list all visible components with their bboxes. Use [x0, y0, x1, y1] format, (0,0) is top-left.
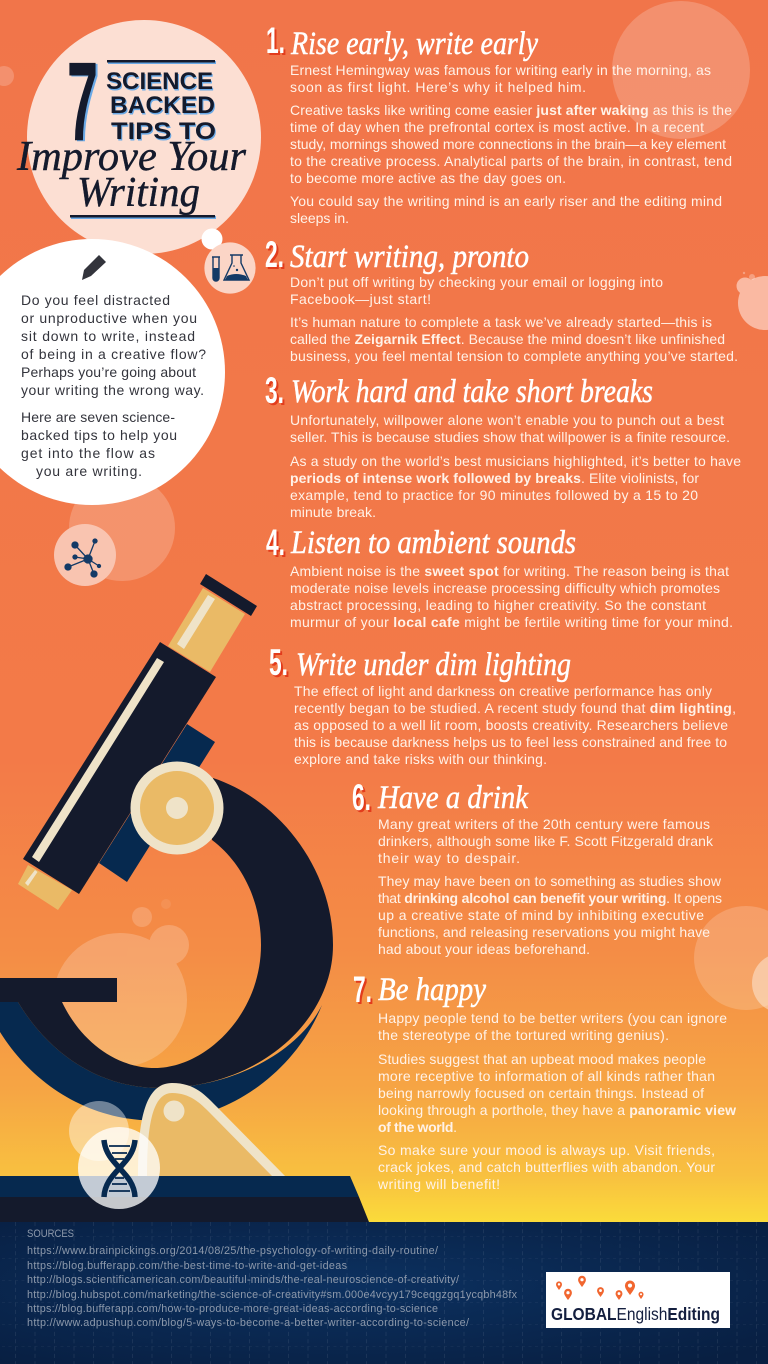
title: 7: 7 [67, 39, 98, 164]
title: 7 [67, 39, 100, 165]
tip 7 body: looking through a porthole, they have a panoramic view [378, 1102, 736, 1118]
tip 5 body: The effect of light and darkness on creative performance has only [294, 683, 712, 699]
tip 5 number: 5. [269, 642, 288, 683]
tip 3 body: Unfortunately, willpower alone won’t enable you to punch out a best [290, 412, 724, 428]
tip 7 number [353, 969, 374, 1012]
tip 1 body: Creative tasks like writing come easier just after waking as this is the [290, 102, 732, 118]
title: science backed tips to: SCIENCE [107, 70, 214, 96]
tip 7 body: crack jokes, and catch butterflies with abandon. Your [378, 1159, 715, 1175]
tip 3 number: 3. [265, 370, 284, 411]
tip 2 body [290, 274, 738, 364]
tip 3 body: minute break. [290, 504, 376, 520]
tip 7 number: 7. [355, 971, 374, 1012]
tip 3 heading: Work hard and take short breaks [291, 374, 653, 410]
tip 7 number: 7. [353, 969, 372, 1010]
icon: pencil [82, 255, 106, 280]
tip 7 body: more receptive to information of all kinds rather than [378, 1068, 715, 1084]
tip 6 body: had about your ideas beforehand. [378, 941, 590, 957]
tip 6 [352, 777, 722, 957]
tip 7 body: Studies suggest that an upbeat mood makes people [378, 1051, 706, 1067]
tip 6 body: that drinking alcohol can benefit your writing. It opens [378, 890, 722, 906]
microscope arm shadow [0, 1002, 322, 1120]
tip 6 number [352, 777, 373, 820]
tip 1 [266, 20, 732, 226]
tip 1 body: You could say the writing mind is an early riser and the editing mind [290, 193, 722, 209]
microscope back plate [99, 724, 215, 882]
title circle: 7 [69, 40, 100, 165]
tip 5 [269, 642, 736, 767]
tip 4 heading: Listen to ambient sounds [290, 525, 576, 561]
tip 5 number: 5. [271, 644, 290, 685]
tip 1 body [290, 62, 732, 226]
logo pins [556, 1276, 644, 1300]
tip 6 body: functions, and releasing reservations you might have [378, 924, 710, 940]
title: improve your writing: Improve Your [16, 134, 247, 180]
tip 5 body: as opposed to a well lit room, boosts creativity. Researchers believe [294, 717, 728, 733]
tip 1 body: sleeps in. [290, 210, 349, 226]
microscope [0, 574, 369, 1222]
intro text [21, 292, 206, 479]
title: improve your writing: Writing [77, 170, 200, 216]
microscope upper tube [168, 588, 245, 672]
microscope lower tube [18, 865, 72, 910]
tip 3 number [265, 370, 286, 413]
icon: molecule [54, 524, 116, 586]
tip 7 body: writing will benefit! [377, 1176, 500, 1192]
microscope focus knob [130, 762, 224, 854]
microscope stand [138, 1083, 285, 1176]
intro text: Do you feel distracted [21, 292, 170, 308]
tip 6 body: Many great writers of the 20th century were famous [378, 816, 710, 832]
icon: DNA helix [78, 1127, 160, 1209]
tip 7 heading: Be happy [378, 972, 486, 1008]
title rule bottom [70, 215, 216, 219]
tip 7 body: So make sure your mood is always up. Visit friends, [378, 1142, 715, 1158]
sources: https://blog.bufferapp.com/how-to-produce-more-great-ideas-according-to-science [27, 1303, 438, 1315]
title: science backed tips to: TIPS TO [111, 118, 216, 145]
tip 7 body: the stereotype of the tortured writing genius). [378, 1027, 669, 1043]
tip 4 [266, 522, 733, 630]
tip 3 body [290, 412, 741, 520]
tip 1 body: time of day when the prefrontal cortex is most active. In a recent [290, 119, 704, 135]
tip 2 heading: Start writing, pronto [290, 239, 529, 275]
tip 3 body: As a study on the world’s best musicians highlighted, it’s better to have [290, 453, 741, 469]
microscope body highlight [32, 658, 164, 862]
intro text: of being in a creative flow? [21, 346, 206, 362]
tip 3 number: 3. [267, 372, 286, 413]
intro text: backed tips to help you [21, 427, 177, 443]
microscope base [0, 1176, 369, 1222]
tip 2 [265, 234, 738, 364]
tip 2 number: 2. [265, 234, 284, 275]
tip 4 body: moderate noise levels increase processing difficulty which promotes [290, 580, 720, 596]
small bubbles above arm [132, 899, 171, 927]
microscope body [23, 642, 216, 894]
tip 6 body [378, 816, 722, 957]
tip 1 heading: Rise early, write early [290, 26, 538, 62]
tip 7 body: Happy people tend to be better writers (you can ignore [378, 1010, 727, 1026]
intro text: you are writing. [36, 463, 142, 479]
title: science backed tips to: SCIENCE [106, 68, 213, 95]
intro text: Here are seven science- [21, 409, 175, 425]
tip 4 body: murmur of your local cafe might be fertile writing time for your mind. [290, 614, 733, 630]
title: science backed tips to: TIPS TO [112, 120, 217, 146]
tip 2 body: called the Zeigarnik Effect. Because the mind doesn’t like unfinished [290, 331, 725, 347]
tip 4 body [290, 563, 733, 630]
tip 1 body: study, mornings showed more connections in the brain—a key element [290, 136, 726, 152]
sources: https://www.brainpickings.org/2014/08/25/the-psychology-of-writing-daily-routine/ [27, 1245, 438, 1257]
title: improve your writing [16, 134, 247, 216]
tip 5 body: this is because darkness helps us to feel less constrained and free to [294, 734, 727, 750]
tip 3 body: seller. This is because studies show that willpower is a finite resource. [290, 429, 730, 445]
tip 1 body: to become more active as the day goes on. [290, 170, 566, 186]
tip 5 number [269, 642, 290, 685]
tip 4 number: 4. [268, 524, 287, 565]
tip 5 heading: Write under dim lighting [296, 647, 571, 683]
title rule top [107, 60, 216, 64]
tip 6 body: their way to despair. [378, 850, 520, 866]
tip 6 body: up a creative state of mind by inhibiting executive [378, 907, 704, 923]
sources: http://blog.hubspot.com/marketing/the-science-of-creativity#sm.000e4vcyy179ceqgzgq1ycqbh48fx [27, 1289, 518, 1301]
microscope upper highlight [177, 595, 215, 649]
tip 1 body: to the creative process. Analytical parts of the brain, in contrast, tend [290, 153, 732, 169]
tip 5 body: recently began to be studied. A recent study found that dim lighting, [294, 700, 736, 716]
tip 6 body: They may have been on to something as studies show [378, 873, 722, 889]
tip 1 number: 1. [268, 22, 287, 63]
tip 7 [353, 969, 736, 1192]
title: science backed tips to: BACKED [110, 92, 215, 119]
microscope arm [0, 778, 333, 1088]
icon: test tube and flask [204, 242, 256, 294]
footer panel [0, 1222, 768, 1364]
tip 2 body: Facebook—just start! [290, 291, 431, 307]
intro text: Perhaps you’re going about [21, 364, 196, 380]
tip 3 body: example, tend to practice for 90 minutes followed by a 15 to 20 [290, 487, 698, 503]
microscope eyepiece cap [200, 574, 257, 616]
tip 2 body: Don’t put off writing by checking your email or logging into [290, 274, 663, 290]
tip 2 body: It’s human nature to complete a task we’ve already started—this is [290, 314, 712, 330]
tip 2 number [265, 234, 286, 277]
tip 1 body: Ernest Hemingway was famous for writing early in the morning, as [290, 62, 711, 78]
tip 5 body [294, 683, 736, 767]
intro text: or unproductive when you [21, 310, 197, 326]
tip 6 heading: Have a drink [377, 780, 529, 816]
logo wordmark: GLOBALEnglishEditing [551, 1304, 720, 1324]
tip 2 number: 2. [267, 236, 286, 277]
tip 1 body: soon as first light. Here’s why it helped him. [290, 79, 586, 95]
intro text: sit down to write, instead [21, 328, 195, 344]
intro text: get into the flow as [21, 445, 155, 461]
tip 2 body: business, you feel mental tension to complete anything you’ve started. [290, 348, 738, 364]
title: science backed tips to: BACKED [111, 94, 216, 120]
microscope lower highlight [25, 870, 38, 886]
sources: SOURCES [27, 1228, 74, 1240]
sources: http://blogs.scientificamerican.com/beautiful-minds/the-real-neuroscience-of-creativity/ [27, 1274, 459, 1286]
title: science backed tips to [106, 68, 217, 146]
tip 7 body: of the world. [378, 1119, 457, 1135]
tip 3 [265, 370, 741, 520]
tip 6 number: 6. [352, 777, 371, 818]
tip 7 body: being narrowly focused on certain things. Instead of [378, 1085, 704, 1101]
bubble near DNA [69, 1101, 129, 1161]
decorative bubbles [0, 1, 768, 1013]
tip 4 number: 4. [266, 522, 285, 563]
tip 6 number: 6. [354, 779, 373, 820]
large bubble behind arm [53, 925, 189, 1067]
sources: https://blog.bufferapp.com/the-best-time-to-write-and-get-ideas [27, 1260, 348, 1272]
sources: http://www.adpushup.com/blog/5-ways-to-become-a-better-writer-according-to-science/ [27, 1317, 469, 1329]
title circle [16, 20, 261, 254]
tip 4 body: Ambient noise is the sweet spot for writing. The reason being is that [290, 563, 729, 579]
tip 5 body: explore and take risks with our thinking. [294, 751, 547, 767]
tip 1 number [266, 20, 287, 63]
tip 3 body: periods of intense work followed by breaks. Elite violinists, for [290, 470, 699, 486]
tip 7 body [377, 1010, 736, 1192]
tip 1 number: 1. [266, 20, 285, 61]
sources [27, 1228, 518, 1329]
tip 4 number [266, 522, 287, 565]
tip 6 body: drinkers, although some like F. Scott Fitzgerald drank [378, 833, 714, 849]
small white thought bubble [202, 228, 222, 250]
intro circle [0, 239, 225, 505]
logo [546, 1272, 730, 1328]
tip 4 body: abstract processing, leading to higher creativity. So the constant [290, 597, 706, 613]
intro text: your writing the wrong way. [21, 382, 204, 398]
